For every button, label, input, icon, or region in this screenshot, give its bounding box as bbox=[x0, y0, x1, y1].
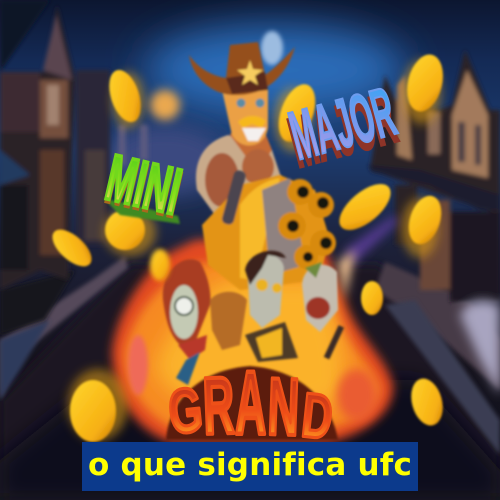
MAJOR jackpot label: MAJOR bbox=[282, 81, 403, 182]
body bbox=[196, 135, 282, 240]
gatling gun bbox=[202, 169, 336, 290]
flame burst behind characters bbox=[112, 215, 398, 442]
GRAND jackpot label: G bbox=[165, 375, 206, 448]
cowboy hat bbox=[189, 42, 295, 95]
caption bar: o que significa ufc bbox=[88, 447, 412, 483]
fist bbox=[242, 149, 274, 185]
MINI jackpot label: MINI bbox=[100, 142, 187, 229]
buildings left bbox=[0, 0, 148, 290]
GRAND jackpot label: A bbox=[235, 352, 266, 453]
GRAND jackpot label: N bbox=[266, 360, 301, 453]
road bbox=[0, 265, 500, 500]
GRAND jackpot label: R bbox=[201, 359, 236, 451]
left sidewalk bbox=[0, 256, 128, 400]
MAJOR jackpot label: MAJOR bbox=[282, 74, 403, 175]
GRAND jackpot label bbox=[165, 352, 338, 453]
zombie boy bbox=[247, 254, 284, 328]
coins bbox=[46, 51, 449, 442]
face bbox=[222, 90, 268, 145]
zombie dog bbox=[302, 265, 338, 332]
street lamp glow bbox=[150, 90, 180, 120]
MINI jackpot label: MINI bbox=[100, 145, 187, 232]
buildings right bbox=[368, 50, 500, 395]
brown pup bbox=[210, 292, 247, 350]
coin glows bbox=[68, 60, 441, 441]
cowboy character bbox=[189, 42, 295, 240]
GRAND jackpot label: D bbox=[299, 381, 336, 453]
zombie trio bbox=[163, 251, 344, 385]
zombie girl bbox=[163, 259, 211, 345]
right sidewalk bbox=[375, 262, 500, 390]
